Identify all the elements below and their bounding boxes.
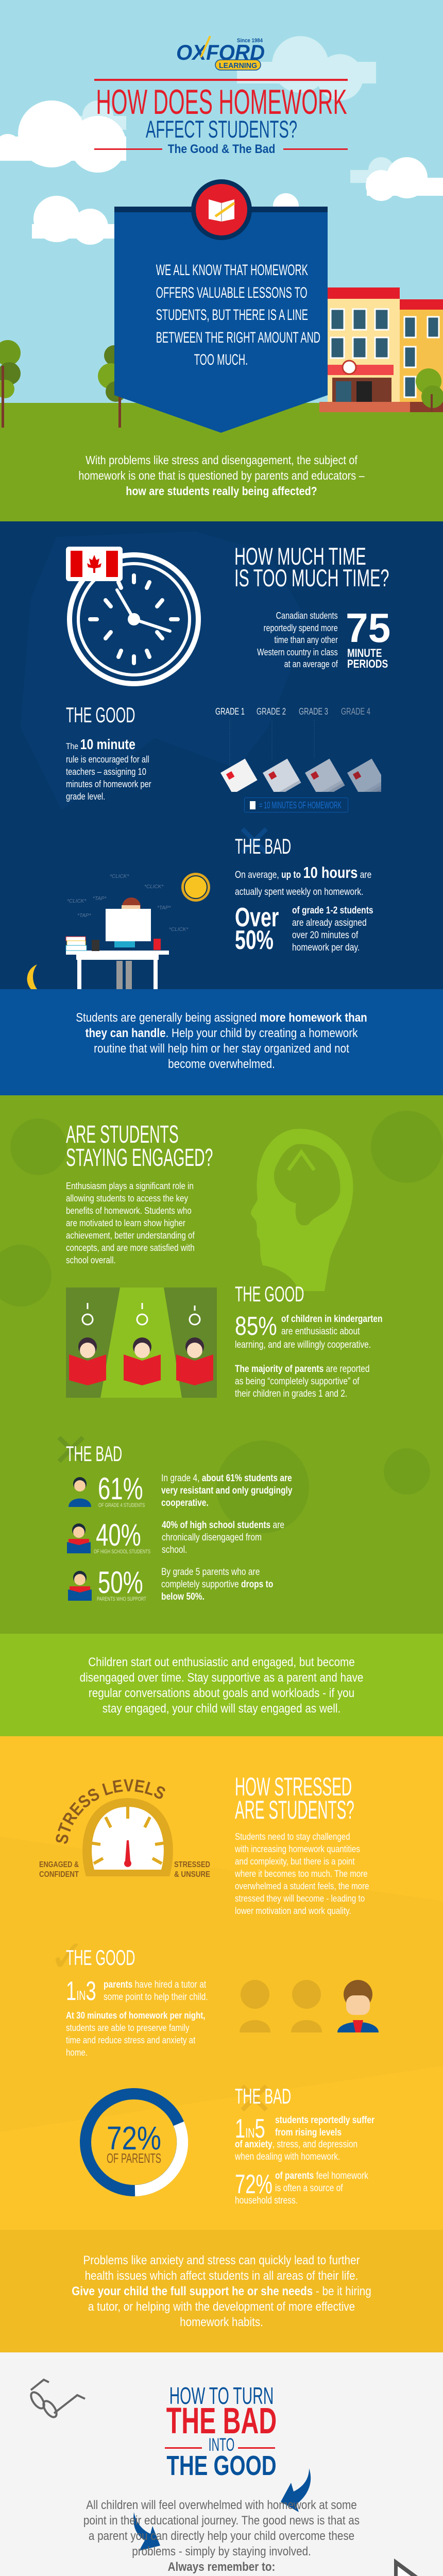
text: 10 minute rule: rule is encouraged for all — [66, 754, 149, 765]
heading: how much time — [234, 543, 389, 591]
panel: intro statement: STUDENTS, BUT THERE IS A LINE — [156, 307, 308, 324]
illustration: student at desk: *CLICK* — [144, 884, 164, 890]
illustration: student at desk: *TAP* — [93, 896, 107, 902]
heading: the good: THE GOOD — [66, 1945, 135, 1970]
stat: 40%: chronically disengaged from — [162, 1532, 262, 1543]
stat: 40%: school. — [162, 1545, 187, 1555]
heading: are students staying engaged — [66, 1121, 213, 1172]
callout: green tip: stay engaged, your child will stay engaged as well. — [103, 1702, 340, 1716]
callout: yellow tip: homework habits. — [180, 2315, 263, 2329]
heading: the good: ✓ — [49, 1932, 86, 1981]
text: closing paragraph: a parent you can directly help your child overcome these — [89, 2529, 354, 2543]
heading: how to turn the bad into the good: THE GOOD — [166, 2450, 277, 2481]
callout: blue tip: they can handle. Help your child by creating a homework — [86, 1026, 357, 1040]
text: intro question: how are students really being affected? — [126, 484, 317, 498]
section: sky header — [0, 0, 443, 521]
text: 10 hours: On average, up to 10 hours are — [235, 863, 371, 882]
logo — [176, 36, 265, 71]
callout: green tip: disengaged over time. Stay supportive as a parent and have — [80, 1671, 363, 1685]
stat: over 50%: Over — [235, 903, 279, 933]
chart: homework by grade — [215, 706, 381, 792]
icon: book in circle — [191, 179, 252, 240]
stat: 1 in 3: home. — [66, 2047, 88, 2058]
callout: blue tip — [0, 989, 443, 1095]
panel: intro statement: BETWEEN THE RIGHT AMOUNT AND — [156, 329, 320, 346]
chart: homework by grade: GRADE 4 — [341, 706, 370, 717]
stat: 50%: completely supportive drops to — [161, 1579, 273, 1590]
text: enthusiasm: concepts, and are more satisfied with — [66, 1243, 195, 1253]
stat: 75 minute periods — [257, 605, 390, 670]
text: closing paragraph: point in their educational journey. The good news is that as — [83, 2514, 360, 2528]
text: closing paragraph: Always remember to: — [168, 2560, 275, 2574]
text: stress paragraph — [235, 1832, 369, 1916]
heading: the bad: THE BAD — [235, 834, 291, 858]
heading: are students staying engaged: STAYING ENGAGED? — [66, 1144, 213, 1172]
stat: 40%: OF HIGH SCHOOL STUDENTS — [94, 1549, 150, 1555]
chart: homework by grade: GRADE 1 — [215, 706, 245, 717]
stat: 85%: as being “completely supportive” of — [235, 1376, 360, 1387]
logo: OXFORD — [176, 40, 265, 64]
stat: over 50%: over 20 minutes of — [292, 930, 358, 941]
text: enthusiasm: Enthusiasm plays a significant role in — [66, 1181, 194, 1191]
stat: 1 in 3: parents have hired a tutor at — [104, 1979, 206, 1990]
stat: 72% household stress: is often a source of — [275, 2183, 343, 2194]
text: closing paragraph — [83, 2498, 360, 2574]
text: closing paragraph: All children will feel overwhelmed with homework at some — [86, 2498, 357, 2512]
text: enthusiasm — [66, 1181, 195, 1265]
heading: how to turn the bad into the good — [165, 2382, 277, 2481]
stat: 1 in 5: when dealing with homework. — [235, 2151, 340, 2162]
section: engagement — [0, 1095, 443, 1634]
title — [94, 79, 348, 156]
heading: the good: THE GOOD — [235, 1282, 304, 1306]
icon: glasses — [30, 2378, 86, 2418]
icon: head silhouette — [251, 1129, 353, 1291]
callout: yellow tip: Give your child the full support he or she needs - be it hiring — [72, 2284, 371, 2298]
logo: LEARNING — [219, 61, 257, 70]
callout: blue tip: routine that will help him or her stay organized and not — [94, 1042, 349, 1056]
stat: 61% — [69, 1471, 293, 1509]
stat: 72% household stress: household stress. — [235, 2195, 298, 2206]
icon: three parents — [240, 1980, 379, 2032]
illustration: three readers with lightbulbs — [66, 1287, 217, 1398]
title: The Good & The Bad — [168, 142, 275, 156]
text: 10 minute rule: minutes of homework per — [66, 779, 151, 789]
stat: 85%: The majority of parents are reported — [235, 1364, 370, 1375]
text: 10 minute rule: teachers – assigning 10 — [66, 767, 146, 777]
text: 10 minute rule — [66, 736, 151, 802]
panel: intro statement — [114, 179, 328, 433]
heading: the good — [49, 1932, 135, 1981]
stat: 50%: 50% — [98, 1565, 143, 1600]
illustration: student at desk: *CLICK* — [110, 874, 129, 879]
text: 10 minute rule: The 10 minute — [66, 736, 135, 752]
text: closing paragraph: problems - simply by staying involved. — [132, 2545, 311, 2558]
text: enthusiasm: benefits of homework. Students who — [66, 1206, 192, 1216]
stat: 1 in 5: 1IN5 — [235, 2114, 265, 2144]
heading: how to turn the bad into the good: INTO — [209, 2435, 234, 2455]
text: enthusiasm: are motivated to learn show higher — [66, 1218, 185, 1228]
panel: intro statement: OFFERS VALUABLE LESSONS TO — [156, 284, 308, 301]
text: enthusiasm: allowing students to access the key — [66, 1193, 188, 1204]
illustration: school building — [319, 287, 443, 412]
illustration: student at desk — [27, 873, 210, 989]
stat: 85%: their children in grades 1 and 2. — [235, 1388, 347, 1399]
stat: 85%: of children in kindergarten — [281, 1314, 383, 1325]
stat: over 50%: homework per day. — [292, 942, 360, 953]
text: 10 hours — [235, 863, 371, 897]
stat: 75 minute periods: Western country in class — [257, 647, 338, 657]
gauge: stress levels: & UNSURE — [174, 1870, 210, 1879]
stat: 40% — [67, 1518, 284, 1555]
text: stress paragraph: with increasing homework quantities — [235, 1844, 360, 1854]
stat: 1 in 3: time and reduce stress and anxiety at — [66, 2035, 195, 2045]
stat: 61%: OF GRADE 4 STUDENTS — [98, 1502, 145, 1509]
stat: 85%: are enthusiastic about — [281, 1326, 360, 1337]
heading: the bad: ✕ — [235, 817, 274, 868]
arrow: to the bad — [281, 2468, 311, 2512]
stat: 72% household stress: of parents feel homework — [275, 2171, 368, 2181]
stat: 61%: 61% — [98, 1471, 143, 1506]
gauge: stress levels: CONFIDENT — [39, 1870, 79, 1879]
stat: 40%: 40% of high school students are — [162, 1520, 284, 1531]
illustration: student at desk: *CLICK* — [67, 899, 87, 904]
chart: homework by grade: GRADE 2 — [257, 706, 286, 717]
illustration: student at desk: *TAP* — [77, 913, 92, 919]
logo: Since 1984 — [237, 38, 263, 44]
callout: blue tip: Students are generally being assigned more homework than — [76, 1011, 367, 1025]
section: turn bad into good — [0, 2352, 443, 2576]
heading: the bad: ✕ — [235, 2074, 274, 2125]
gauge: stress levels — [39, 1780, 210, 1879]
panel: intro statement: TOO MUCH. — [194, 351, 248, 368]
stat: 50%: PARENTS WHO SUPPORT — [97, 1596, 146, 1602]
callout: blue tip: become overwhelmed. — [168, 1057, 275, 1071]
gauge: stress levels: ENGAGED & — [39, 1860, 79, 1869]
stat: 1 in 5 — [235, 2114, 374, 2162]
stat: over 50%: are already assigned — [292, 918, 367, 928]
stat: 75 minute periods: reportedly spend more — [264, 622, 338, 633]
heading: how to turn the bad into the good: THE BAD — [166, 2401, 277, 2442]
legend: 10 minutes of homework — [244, 798, 348, 812]
text: stress paragraph: where it becomes too much. The more — [235, 1869, 368, 1879]
stat: 61%: In grade 4, about 61% students are — [161, 1473, 292, 1484]
callout: yellow tip — [0, 2230, 443, 2352]
stat: 75 minute periods: PERIODS — [347, 657, 388, 670]
heading: the bad: ✕ — [52, 1425, 90, 1477]
stat: 50%: below 50%. — [161, 1591, 205, 1602]
stat: 1 in 5: students reportedly suffer — [275, 2115, 374, 2126]
stat: 61%: cooperative. — [161, 1498, 209, 1509]
stat: 1 in 5: of anxiety, stress, and depression — [235, 2139, 357, 2150]
stat: 85% — [235, 1311, 383, 1399]
callout: yellow tip: health issues which affect students in all areas of their life. — [85, 2269, 358, 2283]
text: stress paragraph: and complexity, but there is a point — [235, 1856, 355, 1867]
text: enthusiasm: school overall. — [66, 1255, 116, 1265]
stat: 50% — [68, 1565, 273, 1602]
callout: green tip: Children start out enthusiastic and engaged, but become — [88, 1655, 355, 1669]
stat: 75 minute periods: Canadian students — [276, 611, 338, 621]
section: how much time — [0, 521, 443, 989]
chart: homework by grade: GRADE 3 — [299, 706, 328, 717]
stat: 85%: learning, and are willingly cooperative. — [235, 1340, 371, 1350]
stat: 85%: 85% — [235, 1311, 277, 1341]
icon: clock with flag — [66, 547, 201, 686]
heading: the good: THE GOOD — [66, 703, 135, 727]
heading: how much time: HOW MUCH TIME — [234, 543, 366, 570]
heading: how to turn the bad into the good: HOW TO TURN — [169, 2382, 274, 2409]
stat: 1 in 3 — [66, 1976, 208, 2058]
callout: green tip — [0, 1634, 443, 1736]
text: stress paragraph: lower motivation and work quality. — [235, 1906, 351, 1916]
panel: intro statement: WE ALL KNOW THAT HOMEWORK — [156, 262, 308, 279]
illustration: trees — [0, 340, 124, 428]
illustration: student at desk: *CLICK* — [169, 927, 189, 933]
heading: how much time: IS TOO MUCH TIME? — [234, 564, 389, 591]
text: 10 hours: actually spent weekly on homework. — [235, 887, 363, 897]
heading: how stressed — [235, 1772, 354, 1824]
section: stress — [0, 1736, 443, 2230]
callout: green tip: regular conversations about goals and workloads - if you — [89, 1686, 354, 1700]
title: HOW DOES HOMEWORK — [96, 82, 347, 122]
legend: 10 minutes of homework: = 10 MINUTES OF HOMEWORK — [259, 800, 342, 810]
illustration: student at desk: *TAP* — [157, 905, 172, 911]
stat: 1 in 3: students are able to preserve family — [66, 2023, 190, 2033]
stat: 75 minute periods: at an average of — [284, 659, 338, 669]
heading: are students staying engaged: ARE STUDENTS — [66, 1121, 179, 1148]
text: enthusiasm: achievement, better understanding of — [66, 1230, 195, 1241]
callout: yellow tip: a tutor, or helping with the development of more effective — [88, 2300, 355, 2314]
text: intro question: With problems like stress and disengagement, the subject of — [86, 453, 357, 467]
heading: the bad: THE BAD — [235, 2084, 291, 2108]
heading: how stressed: ARE STUDENTS? — [235, 1795, 354, 1824]
stat: 1 in 3: some point to help their child. — [104, 1992, 208, 2003]
arrow: to the good — [133, 2512, 160, 2551]
stat: 75 minute periods: time than any other — [275, 635, 338, 645]
chart: 72% of parents donut: 72% — [107, 2120, 161, 2157]
heading: the bad — [235, 2074, 291, 2125]
callout: yellow tip: Problems like anxiety and stress can quickly lead to further — [83, 2253, 360, 2267]
heading: the bad: THE BAD — [66, 1442, 122, 1466]
stat: 50%: By grade 5 parents who are — [161, 1567, 260, 1578]
title: AFFECT STUDENTS? — [146, 115, 297, 143]
stat: 75 minute periods: MINUTE — [347, 647, 382, 659]
stat: 75 minute periods: 75 — [346, 605, 390, 651]
heading: the bad — [235, 817, 291, 868]
text: stress paragraph: overwhelmed a student feels, the more — [235, 1881, 369, 1891]
stat: over 50% — [235, 903, 373, 955]
stat: 1 in 3: 1IN3 — [66, 1976, 96, 2006]
stat: 61%: very resistant and only grudgingly — [161, 1485, 293, 1496]
heading: the bad — [52, 1425, 122, 1477]
heading: how stressed: HOW STRESSED — [235, 1772, 352, 1801]
text: intro question: homework is one that is questioned by parents and educators – — [78, 469, 365, 482]
text: stress paragraph: Students need to stay challenged — [235, 1832, 350, 1842]
stat: 1 in 5: from rising levels — [275, 2127, 342, 2138]
stat: 72% household stress: 72% — [235, 2170, 272, 2199]
stat: 72% household stress — [235, 2170, 368, 2206]
chart: 72% of parents donut — [80, 2088, 188, 2196]
illustration: laptop — [345, 2558, 443, 2576]
stat: 40%: 40% — [96, 1518, 141, 1552]
stat: over 50%: of grade 1-2 students — [292, 905, 373, 916]
text: stress paragraph: stressed they will become - leading to — [235, 1893, 365, 1904]
text: intro question — [78, 453, 365, 498]
text: 10 minute rule: grade level. — [66, 791, 105, 802]
stat: 1 in 3: At 30 minutes of homework per night, — [66, 2010, 206, 2021]
stat: over 50%: 50% — [235, 925, 274, 955]
